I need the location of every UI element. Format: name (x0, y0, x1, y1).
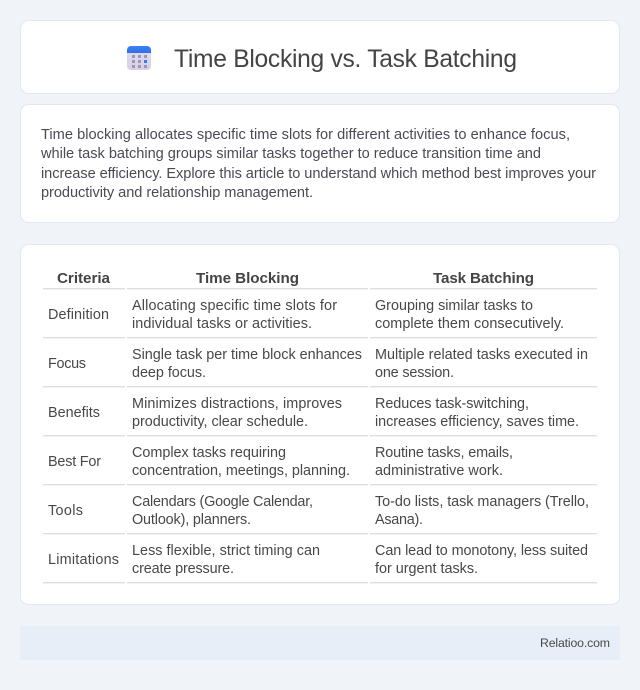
intro text: Time blocking allocates specific time slots for different activities to enhance focus, (41, 127, 570, 143)
row: best for: Routine tasks, emails, (375, 445, 513, 461)
row: tools (48, 494, 589, 528)
row: focus: deep focus. (132, 365, 206, 381)
intro text (40, 127, 596, 201)
row: limitations: Less flexible, strict timing can (132, 543, 320, 559)
row: benefits: Benefits (48, 405, 100, 421)
table header: Criteria (57, 270, 111, 287)
footer (20, 626, 620, 660)
row: focus: Multiple related tasks executed in (375, 347, 588, 363)
intro text: increase efficiency. Explore this article to understand which method best improves your (41, 166, 596, 182)
row: tools: Outlook), planners. (132, 512, 251, 528)
row: limitations: for urgent tasks. (375, 561, 478, 577)
row: definition: complete them consecutively. (375, 316, 564, 332)
row: limitations: create pressure. (132, 561, 234, 577)
icon: calendar (127, 46, 151, 70)
row: tools: Tools (48, 503, 83, 519)
row: limitations (48, 543, 588, 577)
row: limitations: Can lead to monotony, less suited (375, 543, 588, 559)
panel: title header (20, 20, 620, 94)
row: tools: Asana). (375, 512, 423, 528)
intro text: while task batching groups similar tasks together to reduce transition time and (40, 146, 541, 162)
row: definition (48, 298, 564, 332)
row: limitations: Limitations (48, 552, 119, 568)
table header: Task Batching (433, 270, 534, 287)
row: benefits: Reduces task-switching, (375, 396, 529, 412)
panel: comparison table (20, 244, 620, 604)
row: definition: Grouping similar tasks to (375, 298, 533, 314)
table header: Time Blocking (196, 270, 299, 287)
row: focus (48, 347, 588, 381)
row: benefits: Minimizes distractions, improves (132, 396, 342, 412)
row: definition: individual tasks or activities. (132, 316, 312, 332)
row: tools: To-do lists, task managers (Trello, (375, 494, 589, 510)
row: best for (48, 445, 513, 479)
row: benefits (48, 396, 579, 430)
row: benefits: productivity, clear schedule. (132, 414, 308, 430)
row: best for: administrative work. (375, 463, 503, 479)
row: focus: Single task per time block enhances (132, 347, 362, 363)
title: Time Blocking vs. Task Batching (174, 46, 517, 73)
row: focus: Focus (48, 356, 86, 372)
row: focus: one session. (375, 365, 454, 381)
footer credit: Relatioo.com (540, 636, 610, 650)
row: best for: concentration, meetings, planning. (132, 463, 350, 479)
row: definition: Allocating specific time slots for (132, 298, 337, 314)
row: best for: Best For (48, 454, 101, 470)
row: benefits: increases efficiency, saves time. (375, 414, 579, 430)
intro text: productivity and relationship management. (41, 185, 313, 201)
row: definition: Definition (48, 307, 109, 323)
table header (57, 270, 534, 287)
panel: introduction (20, 104, 620, 222)
row: tools: Calendars (Google Calendar, (132, 494, 313, 510)
row: best for: Complex tasks requiring (132, 445, 286, 461)
